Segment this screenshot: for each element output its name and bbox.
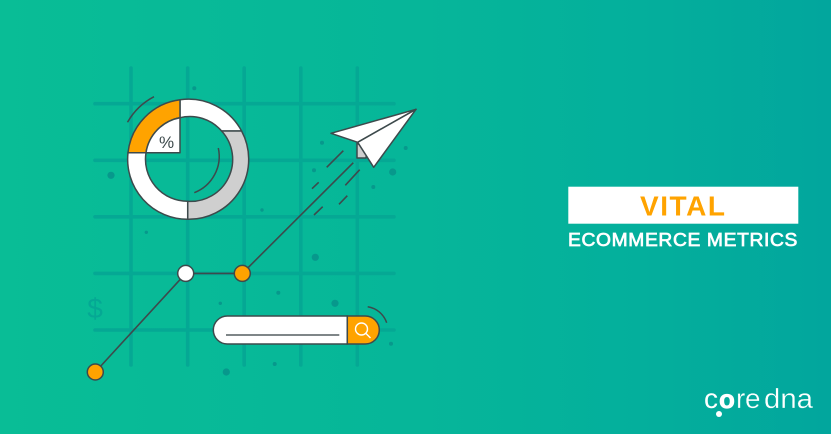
search accent arc	[368, 307, 387, 323]
title banner	[568, 187, 798, 224]
donut accent arcs	[128, 97, 219, 193]
donut: percent wedge	[146, 118, 180, 153]
data point: orange	[234, 265, 250, 281]
icon: dollar sign: $	[87, 293, 103, 324]
donut: grey segment	[188, 131, 249, 219]
subtitle: ECOMMERCE METRICS	[568, 230, 798, 250]
data point: start	[87, 364, 103, 380]
search field	[213, 316, 347, 344]
search input line	[226, 334, 339, 336]
donut chart	[128, 99, 249, 219]
search bar	[213, 316, 379, 344]
trend line	[95, 163, 353, 372]
donut: white lower-left segment	[128, 153, 188, 219]
logo wordmark: core: c	[704, 383, 718, 414]
logo wordmark: dna: dna	[764, 383, 813, 414]
white title box	[568, 187, 798, 224]
data point: white	[178, 265, 194, 281]
logo dot	[716, 411, 722, 417]
percent symbol: %	[159, 133, 174, 152]
background dots	[107, 86, 408, 376]
icon: magnifier	[356, 323, 370, 338]
logo wordmark: core: o	[719, 384, 735, 414]
logo wordmark: core: r	[736, 383, 745, 414]
donut: orange segment	[128, 100, 180, 153]
motion dashes	[312, 151, 360, 215]
icon: paper plane	[331, 109, 416, 167]
donut: white top segment	[180, 99, 242, 131]
search button	[347, 316, 379, 344]
logo wordmark: core: e	[745, 383, 761, 414]
logo: core dna	[704, 383, 813, 417]
title: vital: VITAL	[640, 190, 725, 222]
background grid	[95, 68, 394, 365]
